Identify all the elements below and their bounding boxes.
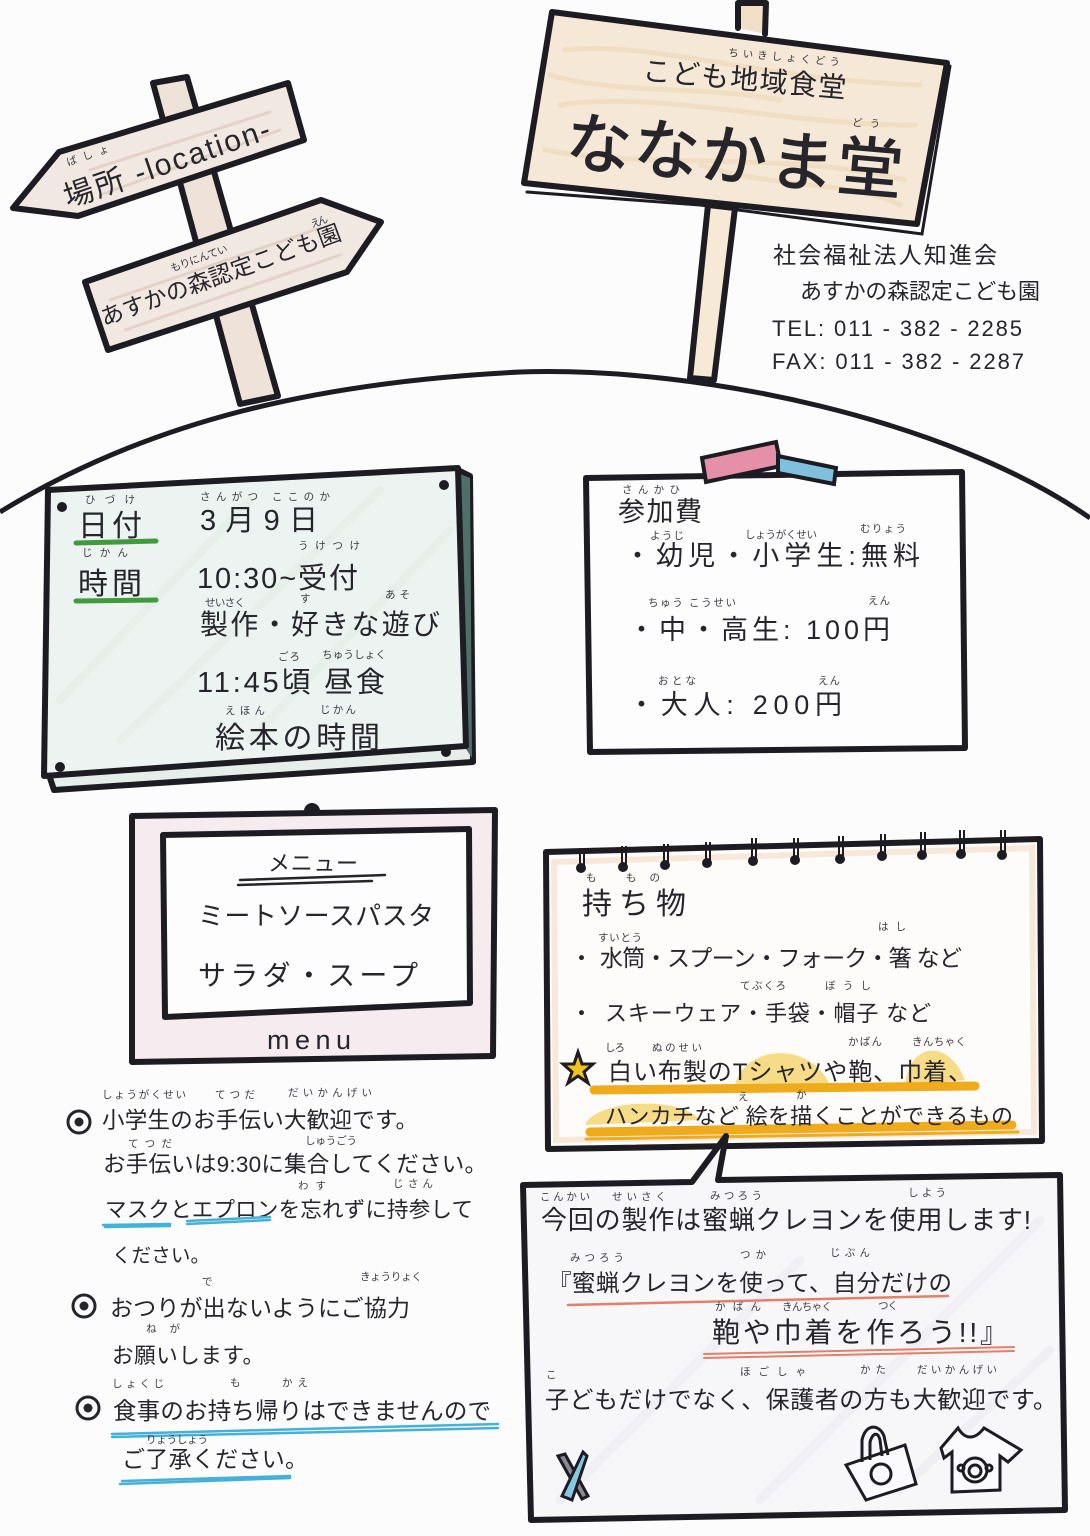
organisation contact details: TEL: 011 - 382 - 2285 — [772, 316, 1022, 341]
hill outline — [0, 372, 1090, 518]
icon: crossed crayons — [558, 1452, 588, 1500]
schedule: さんがつ ここのか — [200, 490, 330, 503]
takeaway text: ご了承ください。 — [122, 1446, 308, 1472]
tape blue — [778, 456, 836, 484]
helper text: じさん — [393, 1178, 433, 1190]
main wooden sign with post — [524, 3, 950, 380]
bring item 1: すいとう — [598, 932, 642, 944]
menu heading underline — [238, 875, 385, 885]
notebook rings — [577, 830, 1006, 872]
arrow sign: nursery name: あすかの森認定こども園 — [97, 219, 344, 331]
bring item 1: はし — [878, 921, 906, 933]
arrow sign: nursery name: えん — [309, 213, 330, 231]
takeaway text — [112, 1377, 498, 1484]
takeaway text: も — [230, 1377, 240, 1389]
bubble line 1: せいさく — [612, 1191, 666, 1203]
icon: target bullet — [77, 1397, 99, 1419]
fee lines: おとな — [658, 675, 696, 687]
arrow sign: location — [13, 83, 304, 216]
organisation contact details: FAX: 011 - 382 - 2287 — [772, 349, 1024, 374]
icon: tote bag with drawing — [846, 1427, 916, 1500]
sign post lower — [690, 205, 735, 380]
fee heading: 参加費 — [618, 497, 702, 527]
fee heading furigana: さんかひ — [622, 484, 680, 496]
menu heading: メニュー — [268, 851, 358, 876]
sign shadow strokes — [527, 66, 950, 234]
schedule: えほん — [225, 705, 265, 717]
helper text: しょうがくせい — [102, 1088, 186, 1101]
bring item 2: ・ — [570, 1000, 593, 1026]
helper text: てつだ — [128, 1138, 172, 1150]
fee board — [586, 472, 965, 752]
helper text: お手伝いは9:30に集合してください。 — [103, 1152, 487, 1177]
schedule: ちゅうしょく — [322, 649, 386, 661]
icon: t-shirt with drawing — [941, 1428, 1021, 1492]
sign subtitle: こども地域食堂 — [641, 55, 847, 104]
arrow sign: nursery name — [85, 200, 381, 350]
fee lines: ・中・高生: 100円 — [628, 615, 890, 645]
bubble quote: つく — [878, 1300, 898, 1312]
bubble line 4: かた — [860, 1364, 886, 1376]
bring item 3: か — [796, 1089, 807, 1101]
fee lines: ちゅう こうせい — [648, 597, 736, 609]
organisation contact details — [772, 242, 1040, 374]
bring heading: 持ち物 — [582, 888, 686, 921]
panel: speech bubble about crayons — [523, 1136, 1065, 1520]
bubble body — [523, 1136, 1065, 1520]
fee lines: ・幼児・小学生:無料 — [624, 541, 920, 571]
direction signpost — [13, 77, 381, 404]
bubble line 1: こんかい — [540, 1191, 590, 1203]
bubble quote: 『蜜蝋クレヨンを使って、自分だけの — [548, 1270, 952, 1296]
fee lines: えん — [818, 675, 840, 687]
bring heading furigana: も もの — [586, 872, 660, 884]
bring item 2 — [570, 980, 931, 1026]
takeaway text: しょくじ — [112, 1378, 164, 1390]
schedule: 3月9日 — [200, 505, 318, 537]
bring item 2: てぶくろ — [740, 980, 786, 992]
notebook page — [546, 839, 1042, 1149]
bring item 3: ぬのせい — [652, 1042, 702, 1054]
helper text: しゅうごう — [305, 1134, 357, 1147]
change text: おつりが出ないようにご協力 — [110, 1295, 410, 1321]
fee lines — [624, 523, 920, 720]
bring item 3: かばん — [848, 1036, 882, 1048]
notebook crayon edge — [554, 848, 1034, 1140]
bubble quote: 鞄や巾着を作ろう!!』 — [712, 1317, 1008, 1348]
helper text: ください。 — [112, 1245, 210, 1267]
schedule: じかん — [320, 704, 356, 716]
organisation contact details: 社会福祉法人知進会 — [773, 242, 997, 268]
panel: what to bring notebook — [546, 830, 1042, 1149]
board hatching — [60, 490, 450, 740]
notes: no takeaway — [77, 1377, 498, 1484]
bring item 3: きんちゃく — [912, 1036, 966, 1048]
fee lines: えん — [868, 595, 890, 607]
wood grain — [545, 48, 920, 205]
sign board — [524, 12, 947, 224]
helper text — [102, 1087, 487, 1267]
organisation contact details: あすかの森認定こども園 — [800, 279, 1040, 304]
menu outer frame — [132, 810, 495, 1062]
bring item 3: しろ — [605, 1042, 625, 1054]
schedule: 10:30~受付 — [197, 562, 358, 595]
schedule: 絵本の時間 — [215, 722, 380, 755]
sign title furigana: どう — [852, 117, 880, 130]
menu items: サラダ・スープ — [198, 960, 418, 991]
arrow sign: location: ばしょ — [65, 143, 111, 169]
notes: exact change — [73, 1271, 422, 1368]
change text — [110, 1271, 422, 1368]
yellow highlight — [585, 1051, 1018, 1139]
schedule: あそ — [385, 589, 410, 601]
date labels: ひづけ — [85, 494, 135, 506]
bubble hatching — [560, 1220, 1050, 1500]
bubble quote — [548, 1247, 1014, 1358]
helper text: マスクとエプロンを忘れずに持参して — [105, 1198, 473, 1222]
date labels: 日付 — [78, 510, 142, 543]
menu hook — [304, 803, 320, 819]
schedule: す — [300, 593, 310, 605]
bubble line 1 — [540, 1187, 1031, 1235]
bubble quote: きんちゃく — [782, 1301, 832, 1313]
bubble line 1: みつろう — [710, 1190, 762, 1202]
arrow sign: nursery name: もりにんてい — [169, 243, 229, 275]
arrow sign: location: 場所 -location- — [60, 113, 275, 215]
takeaway text: 食事のお持ち帰りはできませんので — [113, 1398, 491, 1424]
change text: お願いします。 — [112, 1344, 264, 1368]
takeaway text: りょうしょう — [146, 1434, 208, 1446]
bubble line 4: だいかんげい — [917, 1364, 997, 1376]
bring item 1 — [570, 921, 962, 971]
date labels — [78, 494, 142, 601]
change text: きょうりょく — [360, 1271, 422, 1283]
date labels: 時間 — [78, 568, 142, 601]
panel: date and time — [44, 468, 473, 790]
date labels: じかん — [82, 547, 128, 559]
bring item 2: スキーウェア・手袋・帽子 など — [605, 1001, 931, 1026]
bubble line 1: しよう — [908, 1187, 946, 1199]
schedule: 製作・好きな遊び — [200, 609, 440, 640]
fee lines: ようじ — [650, 530, 684, 542]
schedule: 11:45頃 昼食 — [197, 667, 385, 699]
bubble line 4 — [545, 1364, 1057, 1414]
change text: ねが — [146, 1322, 180, 1335]
bubble line 4: こ — [546, 1369, 556, 1381]
bring item 3: え — [738, 1091, 748, 1103]
helper text: 小学生のお手伝い大歓迎です。 — [102, 1108, 418, 1133]
star icon — [563, 1052, 593, 1083]
sign post upper — [738, 3, 766, 34]
screws — [55, 480, 451, 772]
green underlines — [76, 541, 156, 601]
bubble line 4: ほごしゃ — [740, 1365, 806, 1378]
sign subtitle furigana: ちいきしょくどう — [728, 47, 840, 69]
schedule: うけつけ — [298, 540, 360, 552]
board — [44, 468, 466, 776]
takeaway text: かえ — [282, 1377, 308, 1389]
bring item 1: ・ — [570, 945, 593, 971]
bubble quote: つか — [740, 1249, 766, 1261]
bubble line 4: 子どもだけでなく、保護者の方も大歓迎です。 — [545, 1387, 1057, 1414]
panel: participation fee — [586, 442, 965, 752]
bring item 3 — [605, 1036, 1013, 1129]
fee lines: むりょう — [860, 523, 906, 535]
fee lines: しょうがくせい — [745, 528, 817, 541]
sign title: ななかま堂 — [563, 105, 906, 208]
bring item 2: ぼうし — [825, 980, 871, 992]
menu items: ミートソースパスタ — [198, 901, 434, 931]
schedule — [197, 490, 440, 755]
menu inner frame — [163, 829, 470, 1017]
icon: target bullet — [73, 1295, 95, 1317]
helper text: だいかんげい — [288, 1087, 372, 1099]
board shadow — [48, 470, 473, 790]
notes: children helpers — [68, 1087, 487, 1267]
tape pink — [702, 442, 781, 482]
menu label: menu — [267, 1025, 351, 1055]
schedule: ごろ — [278, 650, 300, 663]
bring item 3: 白い布製のTシャツや鞄、巾着、 — [608, 1059, 972, 1086]
bubble line 1: 今回の製作は蜜蝋クレヨンを使用します! — [541, 1205, 1031, 1235]
fee lines: ・大人: 200円 — [628, 690, 842, 720]
helper text: わす — [298, 1180, 326, 1192]
bubble quote: みつろう — [570, 1252, 624, 1264]
change text: で — [202, 1276, 212, 1288]
helper text: てつだ — [215, 1089, 255, 1101]
bubble quote: じぶん — [830, 1247, 870, 1259]
bring item 1: 水筒・スプーン・フォーク・箸 など — [600, 945, 962, 971]
schedule: せいさく — [205, 597, 245, 609]
menu items — [198, 901, 434, 991]
signpost pole — [153, 77, 278, 404]
panel: menu — [132, 803, 495, 1062]
bubble quote: かばん — [715, 1301, 761, 1313]
bring item 3: ハンカチなど 絵を描くことができるもの — [605, 1104, 1013, 1129]
board side band — [460, 474, 472, 758]
icon: target bullet — [68, 1111, 90, 1133]
